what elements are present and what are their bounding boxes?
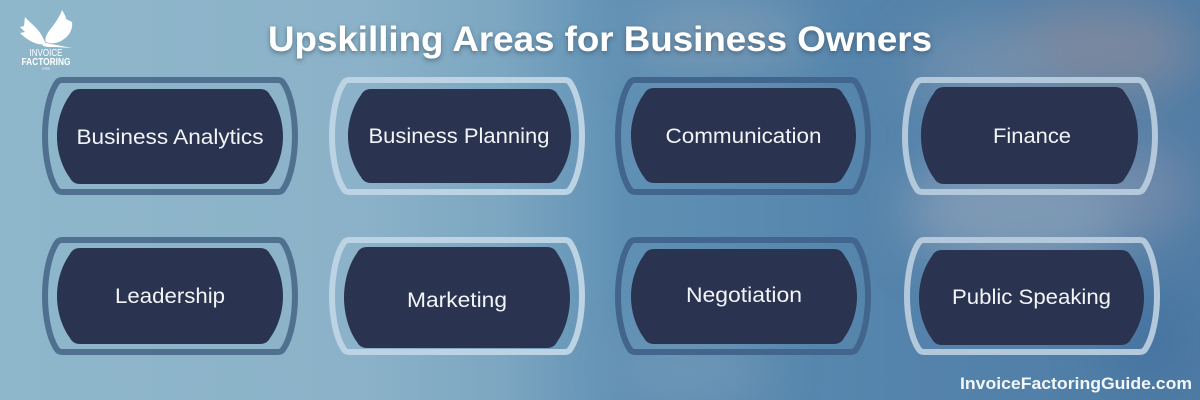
title: Upskilling Areas for Business Owners: [268, 20, 932, 59]
card: Business Planning: Business Planning: [368, 124, 550, 148]
card: Leadership: [45, 240, 295, 352]
card: Negotiation: Negotiation: [686, 283, 802, 307]
card: Marketing: Marketing: [407, 288, 507, 312]
card: Public Speaking: Public Speaking: [952, 285, 1111, 309]
card: Public Speaking: [907, 240, 1157, 352]
logo wordmark: [22, 48, 70, 70]
logo wordmark: GUIDE: [42, 66, 50, 70]
card: Leadership: Leadership: [115, 284, 225, 308]
card: Negotiation: [618, 240, 868, 352]
website url: InvoiceFactoringGuide.com: [960, 374, 1192, 393]
logo wordmark: FACTORING: [22, 56, 70, 68]
card: Communication: [618, 80, 868, 192]
logo: Invoice Factoring Guide: [20, 10, 72, 70]
card: Communication: Communication: [666, 124, 822, 148]
card: Business Analytics: [45, 80, 295, 192]
card: Business Planning: [332, 80, 582, 192]
logo wordmark: INVOICE: [30, 48, 63, 59]
card: Finance: [905, 80, 1155, 192]
card: Business Analytics: Business Analytics: [76, 125, 264, 149]
card: Finance: Finance: [993, 124, 1071, 148]
icon: eagle wings: [20, 10, 72, 48]
card: Marketing: [332, 240, 582, 352]
